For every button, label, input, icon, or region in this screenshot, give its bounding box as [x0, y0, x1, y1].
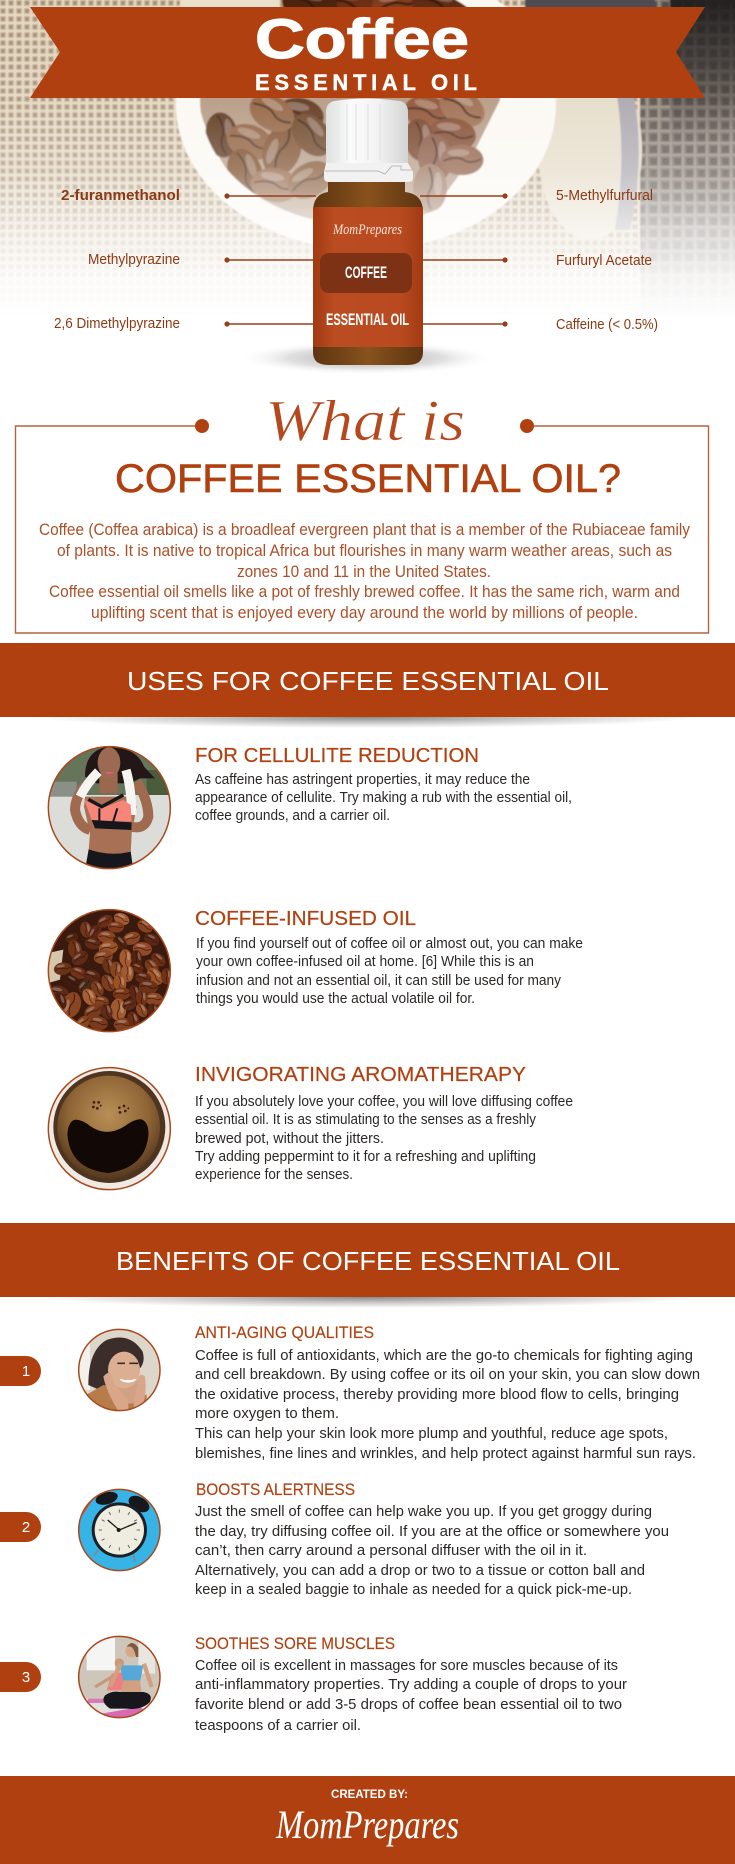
- body text: the day, try diffusing coffee oil. If you are at the office or somewhere you: [195, 1524, 669, 1540]
- section band: uses: [0, 643, 735, 728]
- body text: [195, 1504, 669, 1598]
- body text: essential oil. It is as stimulating to the senses as a freshly: [195, 1112, 537, 1128]
- section band: benefits: BENEFITS OF COFFEE ESSENTIAL OIL: [116, 1246, 620, 1276]
- body text: This can help your skin look more plump and youthful, reduce age spots,: [195, 1426, 668, 1442]
- body text: can’t, then carry around a personal diffuser with the oil in it.: [195, 1543, 587, 1559]
- compound labels: right side: [556, 188, 658, 333]
- compound labels: right side: Furfuryl Acetate: [556, 253, 652, 269]
- use 1: cellulite reduction: [48, 746, 571, 870]
- number tab 3: [0, 1662, 41, 1692]
- body text: coffee grounds, and a carrier oil.: [195, 808, 390, 824]
- use 2: coffee-infused oil: [48, 908, 582, 1032]
- body text: brewed pot, without the jitters.: [195, 1131, 384, 1147]
- description text: uplifting scent that is enjoyed every day around the world by millions of people.: [91, 604, 638, 622]
- body text: teaspoons of a carrier oil.: [195, 1718, 361, 1734]
- body text: blemishes, fine lines and wrinkles, and help protect against harmful sun rays.: [195, 1446, 696, 1462]
- body text: Try adding peppermint to it for a refreshing and uplifting: [195, 1149, 536, 1165]
- created by label: CREATED BY:: [331, 1789, 408, 1801]
- body text: Just the smell of coffee can help wake you up. If you get groggy during: [195, 1504, 652, 1520]
- body text: [195, 1658, 627, 1734]
- number tab 1: [0, 1356, 41, 1386]
- heading: what is: What is: [265, 388, 465, 453]
- bottle label: COFFEE: [345, 263, 387, 282]
- compound labels: right side: Caffeine (< 0.5%): [556, 317, 658, 333]
- description text: of plants. It is native to tropical Africa but flourishes in many warm weather areas, such as: [57, 542, 672, 560]
- number tab 2: 2: [22, 1519, 30, 1536]
- body text: Alternatively, you can add a drop or two to a tissue or cotton ball and: [195, 1563, 645, 1579]
- photo: yoga meditation: [78, 1636, 161, 1718]
- photo: fit woman with towel: [48, 746, 172, 870]
- hero background: burlap, cup and coffee beans: [0, 0, 735, 294]
- number tab 3: 3: [22, 1669, 30, 1686]
- body text: your own coffee-infused oil at home. [6] While this is an: [196, 954, 534, 970]
- heading: SOOTHES SORE MUSCLES: [195, 1634, 395, 1653]
- section band: uses: USES FOR COFFEE ESSENTIAL OIL: [127, 666, 609, 696]
- heading: BOOSTS ALERTNESS: [196, 1480, 355, 1499]
- compound labels: left side: Methylpyrazine: [88, 252, 180, 268]
- footer: [0, 1776, 735, 1864]
- description text: zones 10 and 11 in the United States.: [237, 563, 491, 581]
- body text: more oxygen to them.: [195, 1406, 339, 1422]
- number tab 1: 1: [22, 1363, 30, 1380]
- body text: things you would use the actual volatile oil for.: [196, 991, 475, 1007]
- compound labels: left side: 2,6 Dimethylpyrazine: [54, 316, 180, 332]
- compound labels: left side: [54, 188, 180, 332]
- description text: Coffee essential oil smells like a pot of freshly brewed coffee. It has the same rich, warm and: [49, 583, 680, 601]
- body text: experience for the senses.: [195, 1167, 353, 1183]
- bottle label: ESSENTIAL OIL: [326, 310, 409, 329]
- photo: coffee cup with smile: [48, 1068, 170, 1190]
- bottle label: [313, 207, 423, 347]
- body text: appearance of cellulite. Try making a rub with the essential oil,: [195, 790, 572, 806]
- bottle cap: [324, 98, 413, 182]
- number tab 2: [0, 1512, 41, 1542]
- body text: [195, 1094, 573, 1183]
- body text: keep in a sealed baggie to inhale as needed for a quick pick-me-up.: [195, 1582, 632, 1598]
- body text: As caffeine has astringent properties, it may reduce the: [195, 772, 530, 788]
- photo: smiling woman: [78, 1328, 161, 1412]
- heading: INVIGORATING AROMATHERAPY: [195, 1063, 526, 1086]
- body text: the oxidative process, thereby providing more blood flow to cells, bringing: [195, 1387, 679, 1403]
- bottle label: MomPrepares: [332, 222, 402, 238]
- use 3: invigorating aromatherapy: [48, 1063, 573, 1190]
- body text: If you absolutely love your coffee, you will love diffusing coffee: [195, 1094, 573, 1110]
- body text: Coffee oil is excellent in massages for sore muscles because of its: [195, 1658, 618, 1674]
- photo: alarm clock: [78, 1488, 161, 1572]
- heading: coffee essential oil: COFFEE ESSENTIAL OIL?: [115, 457, 621, 501]
- heading: FOR CELLULITE REDUCTION: [195, 744, 479, 767]
- benefit 2: boosts alertness: [0, 1480, 669, 1598]
- body text: anti-inflammatory properties. Try adding a couple of drops to your: [195, 1677, 627, 1693]
- logo: momprepares: MomPrepares: [275, 1802, 459, 1847]
- body text: infusion and not an essential oil, it can still be used for many: [196, 973, 562, 989]
- heading: COFFEE-INFUSED OIL: [195, 907, 416, 930]
- compound labels: right side: 5-Methylfurfural: [556, 188, 653, 204]
- body text: favorite blend or add 3-5 drops of coffee bean essential oil to two: [195, 1697, 622, 1713]
- body text: [195, 1348, 700, 1462]
- description text: Coffee (Coffea arabica) is a broadleaf evergreen plant that is a member of the Rubiaceae family: [39, 521, 691, 539]
- panel: what is coffee essential oil: [16, 388, 708, 633]
- section band: benefits: [0, 1223, 735, 1308]
- benefit 3: soothes sore muscles: [0, 1627, 627, 1734]
- description text: [39, 521, 691, 622]
- subtitle: essential oil: ESSENTIAL OIL: [255, 70, 477, 95]
- body text: [196, 936, 583, 1007]
- body text: Coffee is full of antioxidants, which are the go-to chemicals for fighting aging: [195, 1348, 693, 1364]
- benefit 1: anti-aging: [0, 1320, 700, 1462]
- heading: ANTI-AGING QUALITIES: [195, 1323, 374, 1342]
- body text: If you find yourself out of coffee oil or almost out, you can make: [196, 936, 583, 952]
- essential oil bottle: [236, 98, 496, 375]
- title banner: [30, 7, 705, 98]
- title: Coffee: Coffee: [255, 7, 469, 70]
- connector lines with dots: [224, 193, 508, 327]
- photo: coffee beans: [48, 908, 172, 1032]
- compound labels: left side: 2-furanmethanol: [61, 188, 180, 204]
- body text: and cell breakdown. By using coffee or its oil on your skin, you can slow down: [195, 1367, 700, 1383]
- body text: [195, 772, 572, 824]
